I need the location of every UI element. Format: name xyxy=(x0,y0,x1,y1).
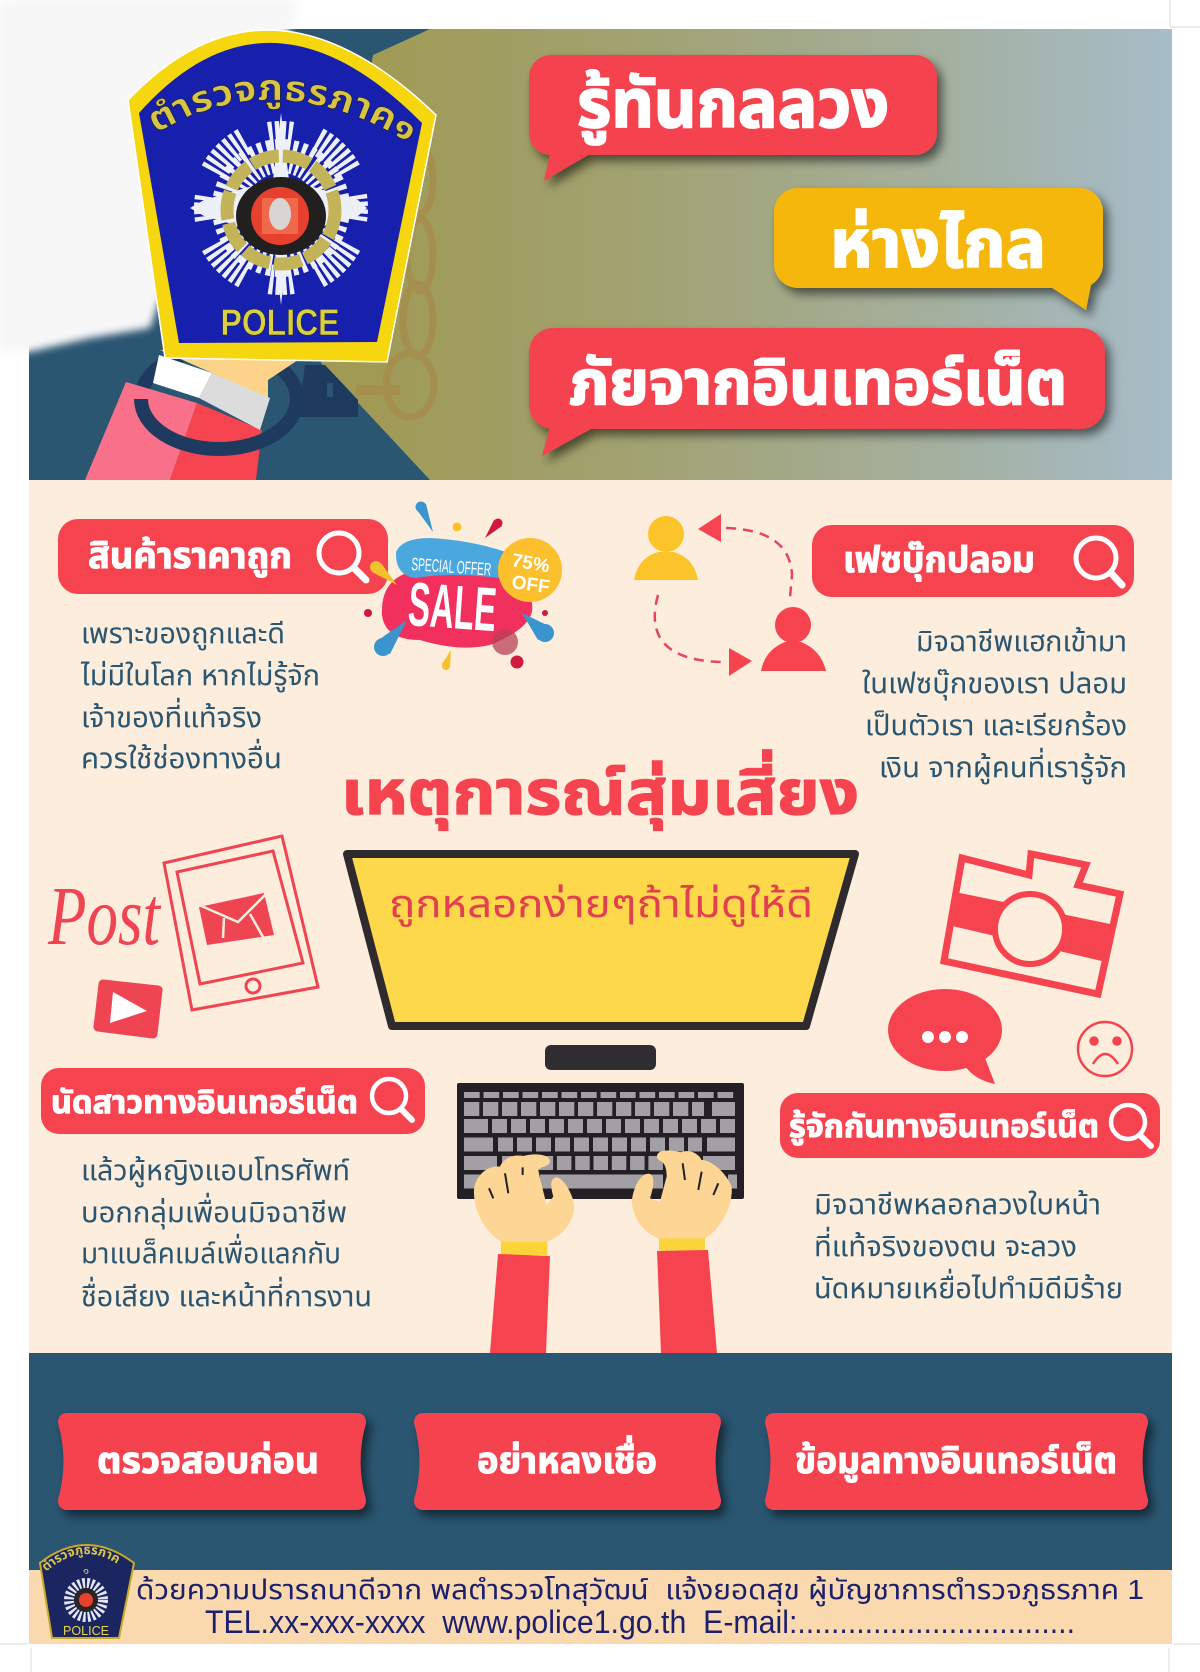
heading pill: เฟซบุ๊กปลอม xyxy=(843,539,1035,581)
body text: มิจฉาชีพหลอกลวงใบหน้า xyxy=(814,1189,1101,1221)
badge curved title: ตำรวจภูธรภาค๑ xyxy=(150,79,414,140)
main heading: เหตุการณ์สุ่มเสี่ยง xyxy=(341,749,859,830)
monitor stand xyxy=(545,1045,656,1070)
left hand xyxy=(474,1154,574,1255)
title bubble 3: ภัยจากอินเทอร์เน็ต xyxy=(569,349,1067,418)
heading pill xyxy=(780,1093,1160,1158)
header panel xyxy=(29,29,1172,480)
handcuff ring and lock xyxy=(141,349,358,449)
badge emblem xyxy=(190,113,367,305)
panel: cheap goods xyxy=(58,519,388,775)
icon: video play xyxy=(98,984,158,1034)
heading pill xyxy=(58,519,388,594)
monitor caption: ถูกหลอกง่ายๆถ้าไม่ดูให้ดี xyxy=(389,884,813,927)
title bubble 3 xyxy=(529,328,1105,456)
icon: two people exchange xyxy=(634,514,826,676)
left sleeve xyxy=(490,1254,550,1353)
body text: เพราะของถูกและดี xyxy=(81,618,285,651)
title bubble 2 xyxy=(774,188,1103,310)
icon: tablet with envelope xyxy=(164,836,318,1010)
button: do not believe: อย่าหลงเชื่อ xyxy=(477,1435,657,1481)
body text xyxy=(814,1189,1123,1305)
button: check first: ตรวจสอบก่อน xyxy=(97,1440,319,1481)
faded white haze xyxy=(0,0,300,352)
panel: fake facebook xyxy=(812,525,1134,785)
right hand xyxy=(632,1151,732,1251)
small police badge xyxy=(38,1544,136,1639)
body text: ชื่อเสียง และหน้าที่การงาน xyxy=(81,1276,372,1313)
body text xyxy=(80,618,320,775)
body text: มาแบล็คเมล์เพื่อแลกกับ xyxy=(81,1233,341,1270)
body text xyxy=(862,626,1127,785)
teal wedge xyxy=(29,29,430,480)
badge POLICE label: POLICE xyxy=(220,302,340,343)
small police badge: ตำรวจภูธรภาค xyxy=(43,1546,119,1570)
body text: ควรใช้ช่องทางอื่น xyxy=(81,738,282,775)
police badge xyxy=(128,30,437,363)
button: do not believe xyxy=(414,1413,721,1510)
handcuff chain xyxy=(356,146,434,417)
body text: บอกกลุ่มเพื่อนมิจฉาชีพ xyxy=(81,1192,347,1229)
body text xyxy=(81,1155,372,1313)
small police badge: ๑ xyxy=(83,1565,89,1577)
icon: sad face xyxy=(1078,1022,1132,1076)
icon: sale sticker: 75% xyxy=(510,550,551,578)
body text: เป็นตัวเรา และเรียกร้อง xyxy=(865,710,1127,742)
small police badge: POLICE xyxy=(63,1623,109,1638)
typing hands xyxy=(474,1151,732,1353)
body text: เงิน จากผู้คนที่เรารู้จัก xyxy=(879,747,1127,785)
icon: sale sticker xyxy=(364,502,562,670)
dark advice band xyxy=(29,1353,1172,1570)
title bubble 2: ห่างไกล xyxy=(830,206,1046,282)
heading pill xyxy=(812,525,1134,597)
footer strip xyxy=(29,1570,1172,1644)
heading pill: นัดสาวทางอินเทอร์เน็ต xyxy=(51,1084,358,1120)
body text: ในเฟซบุ๊กของเรา ปลอม xyxy=(862,668,1127,700)
title bubble 1: รู้ทันกลลวง xyxy=(577,66,889,145)
button: check first xyxy=(58,1413,366,1510)
icon: sale sticker: SALE xyxy=(406,570,499,645)
main cream panel xyxy=(29,480,1172,1353)
title bubble 1 xyxy=(529,55,937,181)
icon: post label: Post xyxy=(47,870,162,963)
body text: มิจฉาชีพแฮกเข้ามา xyxy=(916,626,1127,658)
body text: ที่แท้จริงของตน จะลวง xyxy=(814,1226,1077,1263)
icon: speech bubble xyxy=(888,989,1002,1084)
body text: ไม่มีในโลก หากไม่รู้จัก xyxy=(80,660,320,693)
footer line 1: ด้วยความปรารถนาดีจาก พลตำรวจโทสุวัฒน์ แจ้งยอดสุข ผู้บัญชาการตำรวจภูธรภาค 1 xyxy=(136,1574,1144,1607)
computer monitor xyxy=(347,854,855,1026)
footer line 2: TEL.xx-xxx-xxxx www.police1.go.th E-mail:................................. xyxy=(205,1604,1075,1640)
icon: camera xyxy=(944,854,1120,994)
right sleeve xyxy=(657,1250,717,1353)
icon: sale sticker: OFF xyxy=(510,572,551,598)
body text: เจ้าของที่แท้จริง xyxy=(81,697,262,734)
button: internet information: ข้อมูลทางอินเทอร์เน็ต xyxy=(795,1440,1117,1482)
police arm with cuff xyxy=(85,350,298,480)
panel: meeting online xyxy=(780,1093,1160,1305)
body text: แล้วผู้หญิงแอบโทรศัพท์ xyxy=(81,1155,350,1188)
heading pill: สินค้าราคาถูก xyxy=(88,535,292,577)
body text: นัดหมายเหยื่อไปทำมิดีมิร้าย xyxy=(814,1268,1123,1305)
heading pill xyxy=(41,1068,425,1134)
keyboard xyxy=(457,1083,744,1199)
heading pill: รู้จักกันทางอินเทอร์เน็ต xyxy=(789,1108,1099,1145)
panel: online dating xyxy=(41,1068,425,1313)
button: internet information xyxy=(765,1413,1148,1510)
icon: sale sticker: SPECIAL OFFER xyxy=(411,554,492,580)
